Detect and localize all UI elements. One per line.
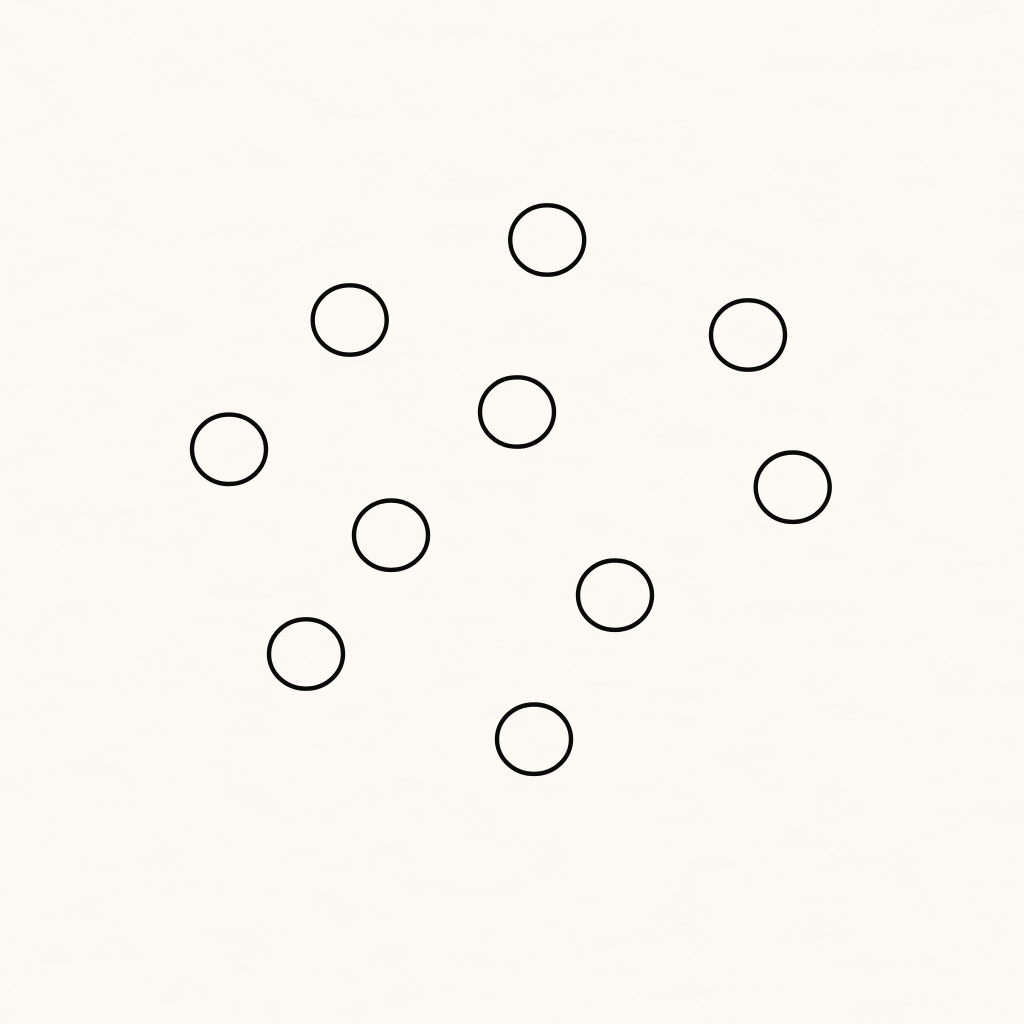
- circle 9: [269, 619, 343, 689]
- circle 3: [711, 300, 785, 370]
- circle 1: [510, 205, 584, 275]
- circle 6: [756, 452, 830, 522]
- circle 2: [313, 285, 387, 355]
- circle 10: [497, 704, 571, 774]
- circle 7: [354, 500, 428, 570]
- circle 8: [578, 560, 652, 630]
- circle 4: [480, 377, 554, 447]
- circle 5: [192, 415, 266, 484]
